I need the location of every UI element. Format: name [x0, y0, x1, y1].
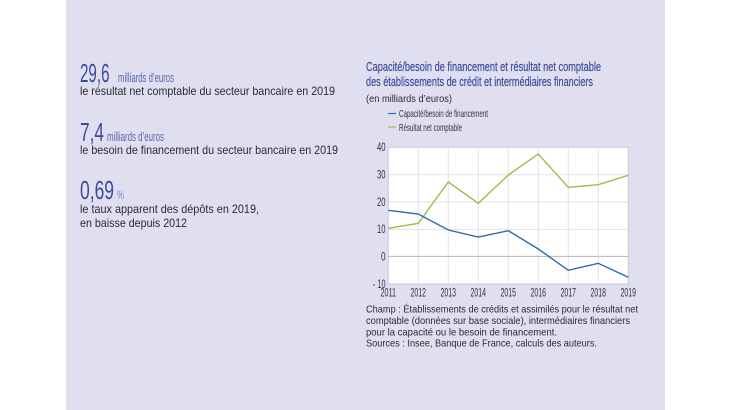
- chart title: [366, 59, 601, 89]
- key figure: 0,69 %: le taux apparent des dépôts en 2019,: [80, 202, 259, 216]
- x axis labels: 2018: [591, 288, 606, 300]
- x axis labels: 2015: [501, 288, 516, 300]
- key figure: 0,69 %: %: [117, 188, 124, 202]
- x axis labels: 2014: [471, 288, 486, 300]
- key figure: 7,4 milliards d'euros: milliards d’euros: [107, 130, 164, 144]
- y axis labels: - 10: [373, 279, 386, 291]
- x axis labels: 2019: [621, 288, 636, 300]
- y axis labels: [373, 142, 386, 291]
- key figure: 29,6 milliards d'euros: milliards d’euros: [118, 71, 174, 85]
- x axis labels: 2013: [441, 288, 456, 300]
- key figure: 7,4 milliards d'euros: 7,4: [80, 119, 104, 147]
- chart unit: (en milliards d’euros): [366, 93, 452, 105]
- source note: Champ : Établissements de crédits et assimilés pour le résultat net: [366, 302, 638, 316]
- chart title: Capacité/besoin de financement et résultat net comptable: [366, 59, 601, 74]
- x axis labels: 2012: [411, 288, 426, 300]
- key figure: 7,4 milliards d'euros: [80, 119, 338, 157]
- panel: key figures: [80, 60, 338, 230]
- line chart: [373, 142, 636, 300]
- source note: comptable (données sur base sociale), intermédiaires financiers: [366, 315, 630, 327]
- x axis labels: 2017: [561, 288, 576, 300]
- x axis labels: [381, 288, 636, 300]
- chart legend: Résultat net comptable: [399, 122, 462, 134]
- key figure: 29,6 milliards d'euros: [80, 60, 335, 98]
- source note: Sources : Insee, Banque de France, calculs des auteurs.: [366, 338, 597, 350]
- key figure: 7,4 milliards d'euros: le besoin de financement du secteur bancaire en 2019: [80, 143, 338, 157]
- y axis labels: 40: [377, 142, 386, 154]
- source note: pour la capacité ou le besoin de financement.: [366, 326, 557, 338]
- y axis labels: 20: [377, 197, 386, 209]
- key figure: 29,6 milliards d'euros: 29,6: [80, 60, 110, 88]
- series: capacité/besoin de financement: [388, 210, 628, 277]
- key figure: 0,69 %: en baisse depuis 2012: [80, 216, 187, 230]
- y axis labels: 10: [377, 224, 386, 236]
- key figure: 29,6 milliards d'euros: le résultat net comptable du secteur bancaire en 2019: [80, 84, 335, 98]
- y axis labels: 30: [377, 170, 386, 182]
- y axis labels: 0: [381, 252, 386, 264]
- x axis labels: 2016: [531, 288, 546, 300]
- chart legend: [388, 108, 488, 134]
- key figure: 0,69 %: 0,69: [80, 177, 114, 205]
- series: résultat net comptable: [388, 154, 628, 228]
- chart legend: Capacité/besoin de financement: [399, 108, 488, 120]
- key figure: 0,69 %: [80, 177, 259, 230]
- source note: [366, 302, 638, 350]
- chart title: des établissements de crédit et intermédiaires financiers: [366, 74, 593, 89]
- x axis labels: 2011: [381, 288, 396, 300]
